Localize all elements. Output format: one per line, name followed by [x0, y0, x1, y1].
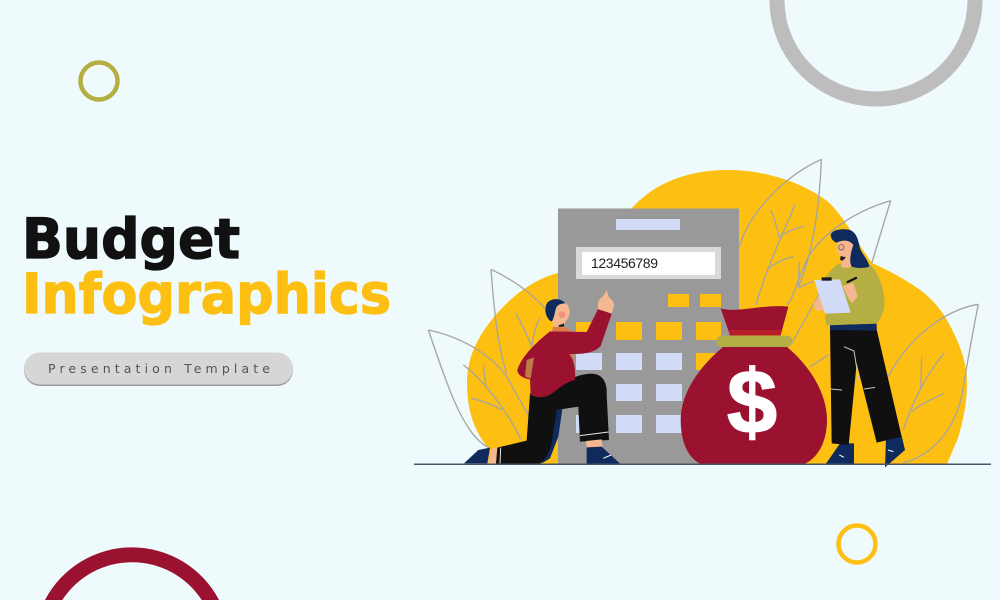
trousers	[496, 374, 609, 464]
money bag	[681, 306, 827, 464]
glasses	[839, 245, 844, 250]
subtitle pill	[24, 352, 293, 386]
neck and head	[553, 317, 567, 327]
clipboard	[814, 279, 851, 314]
bag neck	[721, 306, 788, 335]
left hand	[813, 292, 827, 311]
title	[22, 207, 391, 326]
trousers	[830, 327, 902, 445]
screen digits: 123456789	[591, 255, 658, 271]
person: standing woman	[813, 229, 905, 467]
sweater	[823, 262, 885, 325]
pointing hand	[598, 290, 614, 313]
calculator label bar	[616, 219, 680, 230]
ring: grey top right	[770, 0, 982, 106]
ring: yellow bottom right	[838, 526, 876, 562]
subtitle text: Presentation Template	[48, 361, 270, 376]
back shoe	[464, 448, 490, 463]
bag tie	[717, 336, 792, 347]
title line: Infographics: Infographics	[22, 262, 391, 326]
neck	[841, 257, 851, 268]
right hand and pen	[843, 283, 858, 303]
ground line	[414, 463, 991, 465]
dollar sign: $	[727, 353, 777, 453]
head	[837, 237, 855, 258]
front foot	[586, 439, 603, 448]
yellow background blob	[467, 170, 967, 464]
left leaves	[428, 269, 545, 448]
shoes	[826, 443, 854, 464]
calculator screen	[576, 247, 721, 279]
hair	[831, 229, 869, 268]
calculator	[558, 208, 739, 464]
person: kneeling man	[464, 290, 620, 464]
sweater	[517, 308, 612, 397]
right leaves	[739, 159, 978, 463]
collar	[552, 326, 574, 333]
bag body	[681, 347, 827, 464]
belt	[830, 324, 877, 331]
title line: Budget: Budget	[22, 207, 240, 271]
calculator keys	[576, 294, 721, 433]
ring: crimson bottom left	[45, 547, 219, 600]
ring: olive top left	[80, 62, 118, 100]
